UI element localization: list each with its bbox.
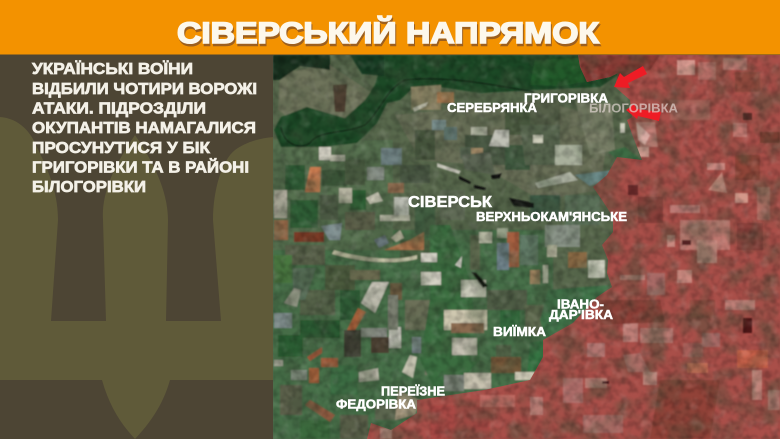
header bar <box>0 0 780 54</box>
arrow: attack toward Bilohorivka <box>626 104 661 121</box>
text block: situation summary: ГРИГОРІВКИ ТА В РАЙОНІ <box>32 158 249 176</box>
label: Pereizne: ПЕРЕЇЗНЕ <box>381 384 445 398</box>
map: satellite view of Siversk direction <box>273 55 780 439</box>
label: Hryhorivka: ГРИГОРІВКА <box>524 92 608 106</box>
map labels: settlements <box>336 92 678 412</box>
label: Verkhnokamianske: ВЕРХНЬОКАМ'ЯНСЬКЕ <box>476 210 627 224</box>
panel: left text background <box>0 54 274 439</box>
map coarse mottling <box>273 55 780 439</box>
text block: situation summary <box>32 60 257 196</box>
arrow: attack toward Hryhorivka <box>614 66 647 88</box>
text block: situation summary: ВІДБИЛИ ЧОТИРИ ВОРОЖІ <box>32 81 257 98</box>
label: Ivano-Darivka: ІВАНО- <box>557 298 604 312</box>
label: Ivano-Darivka <box>549 298 613 322</box>
label: Serebrianka: СЕРЕБРЯНКА <box>447 101 537 115</box>
map fine light texture <box>273 55 780 439</box>
title: СІВЕРСЬКИЙ НАПРЯМОК <box>178 18 601 52</box>
map terrain fields <box>273 55 642 439</box>
label: Siversk: СІВЕРСЬК <box>408 194 493 211</box>
label: Vyimka: ВИЇМКА <box>493 324 546 339</box>
extra dark and green field patches <box>285 165 305 190</box>
occupied territory: red overlay <box>360 55 780 439</box>
label: Ivano-Darivka: ДАР'ІВКА <box>549 308 613 322</box>
text block: situation summary: ПРОСУНУТИСЯ У БІК <box>32 140 210 157</box>
label: Fedorivka: ФЕДОРІВКА <box>336 398 416 412</box>
emblem: trident watermark <box>0 117 274 439</box>
map fine dark texture <box>273 55 780 439</box>
text block: situation summary: БІЛОГОРІВКИ <box>32 179 146 196</box>
text block: situation summary: ОКУПАНТІВ НАМАГАЛИСЯ <box>32 120 256 137</box>
text block: situation summary: АТАКИ. ПІДРОЗДІЛИ <box>32 100 206 118</box>
title: СІВЕРСЬКИЙ НАПРЯМОК <box>177 16 600 50</box>
text block: situation summary: УКРАЇНСЬКІ ВОЇНИ <box>32 60 193 78</box>
label: Bilohorivka: БІЛОГОРІВКА <box>589 102 678 116</box>
